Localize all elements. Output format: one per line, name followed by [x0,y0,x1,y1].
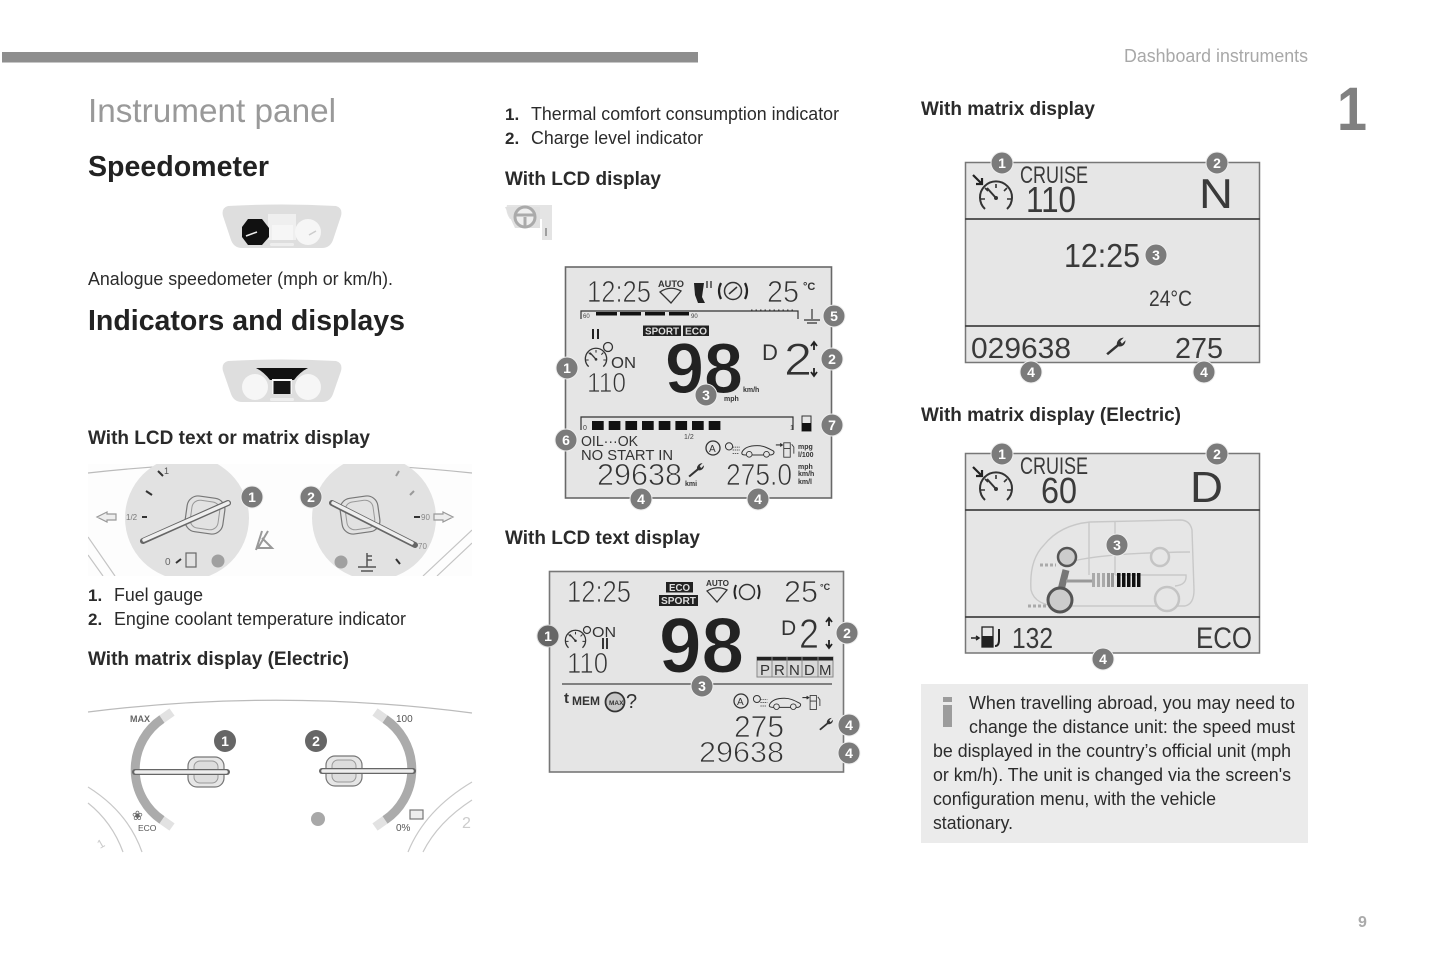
odometer: 029638 [971,333,1071,365]
gear selector: R [774,662,785,679]
note text: change the distance unit: the speed must [969,717,1295,737]
LCD display callouts: 3 [702,387,710,403]
note text: When travelling abroad, you may need to [969,693,1295,713]
legend: gauges: Fuel gauge [114,585,203,605]
gauges: thermal comfort and charge: MAX [130,714,150,724]
icon: info [943,697,952,727]
service range: 275 [1175,333,1223,365]
running header: Dashboard instruments [1124,46,1308,66]
LCD display callouts: 5 [830,308,838,324]
legend: displays: 2. [505,129,519,148]
speed units: km/h [743,387,759,394]
page number: 9 [1358,914,1367,931]
oil status [581,433,673,464]
cruise status: ON [611,355,636,372]
range units: km/l [798,479,812,486]
gear selector: D [804,662,815,679]
note text: or km/h). The unit is changed via the screen's [933,765,1291,785]
oil status: NO START IN [581,447,673,464]
mode labels [643,326,709,338]
gauges: thermal comfort and charge: 1 [94,836,108,852]
LCD display callouts: 2 [828,351,836,367]
note box [921,684,1308,843]
note text: configuration menu, with the vehicle [933,789,1216,809]
icon: wrench [1106,338,1126,355]
icon: cluster with speedometer highlighted [223,204,341,248]
LCD display callouts: 7 [828,417,836,433]
outside temperature: °C [820,582,831,592]
gauges: fuel and coolant: 0 [165,557,171,568]
badge 2: 2 [307,489,315,505]
legend: gauges: 1. [88,586,102,605]
stop-start and range icons [706,441,814,459]
eco label: ECO [1196,622,1252,655]
coolant bar: 90 [691,314,698,320]
mode labels: SPORT [661,596,696,607]
seat belt and pedal icon [694,281,711,303]
gear selector: M [819,662,832,679]
matrix display callouts: 4 [1200,364,1208,380]
gauges: fuel and coolant: 90 [421,513,430,522]
legend: displays: Thermal comfort consumption indicator [531,104,839,124]
memory speed prompt: MEM [572,696,600,708]
temperature: 24°C [1149,286,1192,311]
matrix electric display callouts [991,443,1228,670]
mode labels: SPORT [645,326,679,338]
gear: N [1199,170,1233,217]
coolant bar: 60 [583,314,590,320]
matrix display callouts: 1 [998,155,1006,171]
legend: displays: Charge level indicator [531,128,703,148]
outside temperature: 25 [767,274,799,309]
gear: 2 [784,334,812,385]
icon: wrench [819,718,833,730]
subheading: LCD text or matrix display: With LCD text or matrix display [88,428,370,449]
subheading: matrix display: With matrix display [921,99,1095,120]
heading: speedometer: Speedometer [88,151,269,183]
matrix display callouts: 2 [1213,155,1221,171]
range units: km/h [798,471,814,478]
fuel bar: 0 [583,425,587,432]
cruise speed: 60 [1041,470,1077,511]
wiper icon [658,279,684,303]
coolant bar [581,309,820,323]
icon: cruise speedometer [973,175,1012,209]
gear: D [1190,463,1223,512]
matrix display panel [965,162,1260,365]
icon: cluster with displays highlighted [223,360,341,402]
subheading: LCD display: With LCD display [505,169,661,190]
gear: D [762,340,778,365]
gauges: thermal comfort and charge: 0% [396,823,411,834]
legend: displays [505,104,839,148]
odometer unit: kmi [685,481,697,488]
matrix display callouts: 4 [1027,364,1035,380]
gauges: thermal comfort and charge: 2 [462,815,471,832]
outside temperature: °C [803,281,815,293]
matrix electric display panel [965,453,1260,655]
LCD display panel [566,267,832,498]
gauges: fuel and coolant: 1 [164,466,169,476]
memory speed prompt: ? [626,691,637,713]
gear [762,334,817,385]
note text: be displayed in the country’s official unit (mph [933,741,1291,761]
header bar [2,52,698,62]
badge 1 [241,486,263,508]
cruise status: ON [592,624,616,641]
matrix electric display callouts: 4 [1099,651,1107,667]
LCD display callouts: 6 [562,432,570,448]
clock: 12:25 [1064,237,1140,274]
clock: 12:25 [567,574,631,609]
LCD text display callouts: 4 [845,745,853,761]
matrix electric display callouts: 1 [998,446,1006,462]
fuel bar: 1/2 [684,434,694,441]
title: Instrument panel [88,92,336,129]
parking brake icon [734,584,760,600]
stop-start and range icons: l/100 [798,452,814,459]
memory speed prompt: MAX [609,700,624,707]
gauges: fuel and coolant [88,464,472,576]
mode labels [659,582,698,607]
gauges: thermal comfort and charge: 100 [396,714,413,725]
stop-start and range icons: A [737,697,744,708]
gear selector: P [760,662,770,679]
note text: stationary. [933,813,1013,833]
badge 2 [300,486,322,508]
cruise status [565,624,616,680]
badge 1: 1 [248,489,256,505]
gear: D [781,617,796,640]
LCD text display callouts [537,622,860,764]
mode labels: ECO [685,326,707,338]
memory speed prompt: t [564,690,569,707]
icon: cruise speedometer [973,467,1012,500]
cruise label: CRUISE [1020,453,1088,480]
chapter number: 1 [1337,75,1367,143]
speed units: mph [724,396,739,403]
gear selector [757,657,833,679]
vehicle speed: 98 [665,330,743,409]
LCD display callouts: 1 [563,360,571,376]
odometer: 29638 [597,457,682,492]
range icon [971,627,999,647]
gear selector: N [789,662,800,679]
cruise status: 110 [567,648,608,680]
LCD text display callouts: 2 [843,625,851,641]
subheading: matrix display electric: With matrix display (Electric) [921,405,1181,426]
text: speedometer description: Analogue speedometer (mph or km/h). [88,269,393,289]
LCD text display callouts: 3 [698,678,706,694]
legend: gauges: 2. [88,610,102,629]
wiper icon: AUTO [658,279,684,289]
gauges: fuel and coolant: 1/2 [126,513,138,522]
outside temperature: 25 [784,574,818,609]
LCD text display panel [550,572,844,772]
wiper icon [706,579,729,602]
wiper icon: AUTO [706,579,729,588]
range units [798,464,814,486]
gauges: thermal comfort and charge: ❀ [132,808,143,823]
LCD display callouts [555,305,845,510]
mode labels: ECO [669,583,690,594]
cruise label: CRUISE [1020,162,1088,189]
LCD display callouts: 4 [754,491,762,507]
icon: wrench [688,463,704,477]
subheading: matrix display electric: With matrix display (Electric) [88,649,349,670]
matrix display callouts: 3 [1152,247,1160,263]
stop-start and range icons: mpg [798,444,813,451]
memory speed prompt [564,690,637,713]
LCD text display callouts: 4 [845,717,853,733]
stop-start and range icons: A [709,444,716,455]
gauges: thermal comfort and charge: 2 [312,733,320,749]
legend: displays: 1. [505,105,519,124]
parking brake icon [719,282,747,300]
matrix display callouts [991,152,1228,383]
gear: 2 [799,610,819,657]
gauges: thermal comfort and charge: 1 [221,733,229,749]
gauges: thermal comfort and charge [88,700,472,852]
fuel bar [581,416,811,441]
legend: gauges [88,585,406,629]
note text [933,693,1295,833]
range value: 132 [1012,623,1053,655]
clock: 12:25 [587,274,651,309]
cruise status [585,329,636,398]
gauges: fuel and coolant: 70 [418,542,427,551]
subheading: LCD text display: With LCD text display [505,528,700,549]
range: 275 [734,709,784,744]
legend: gauges: Engine coolant temperature indicator [114,609,406,629]
gear [781,610,832,657]
icon: steering wheel [505,205,552,240]
matrix electric display callouts: 2 [1213,446,1221,462]
gauges: thermal comfort and charge: ECO [138,823,157,833]
heading: indicators and displays: Indicators and displays [88,305,405,337]
stop-start and range icons [734,694,820,710]
range units: mph [798,464,813,471]
matrix electric display callouts: 3 [1113,537,1121,553]
oil status: OIL···OK [581,433,638,450]
cruise status: 110 [587,367,626,398]
LCD display callouts: 4 [637,491,645,507]
speed units [724,387,759,403]
range: 275.0 [726,457,792,492]
LCD text display callouts: 1 [544,628,552,644]
cruise speed: 110 [1026,179,1076,220]
odometer: 29638 [699,737,784,769]
fuel bar: 1 [790,425,794,432]
vehicle drivetrain diagram [1028,520,1194,612]
vehicle speed: 98 [659,601,744,689]
